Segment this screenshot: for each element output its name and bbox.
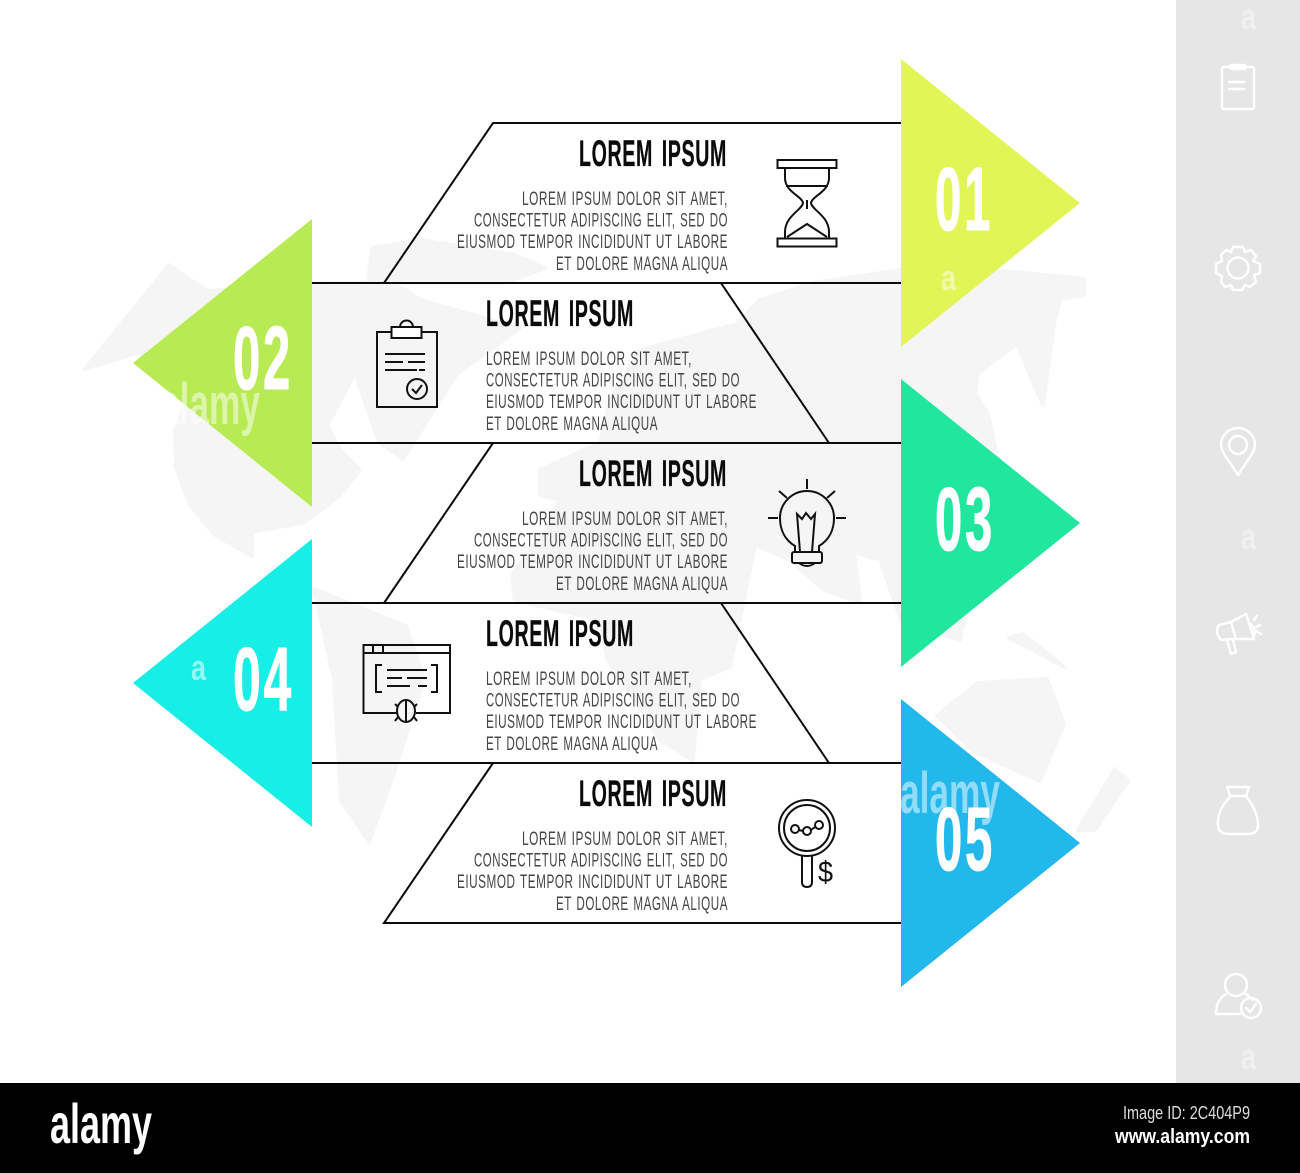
row 4 text: EIUSMOD TEMPOR INCIDIDUNT UT LABORE xyxy=(486,711,757,733)
row 5 text: CONSECTETUR ADIPISCING ELIT, SED DO xyxy=(474,850,728,872)
row 5 text xyxy=(457,773,728,915)
triangle 03 xyxy=(901,379,1080,667)
triangle 05: 05 xyxy=(935,790,995,890)
watermarks: a xyxy=(1241,1036,1257,1077)
watermarks: alamy xyxy=(160,372,260,437)
row 2 text: CONSECTETUR ADIPISCING ELIT, SED DO xyxy=(486,370,740,392)
triangle 04: 04 xyxy=(233,630,294,730)
sidebar icon: gear xyxy=(1216,247,1260,290)
row 5 text: LOREM IPSUM xyxy=(579,773,727,814)
row 5 text: LOREM IPSUM DOLOR SIT AMET, xyxy=(522,828,728,850)
row 3 text xyxy=(457,453,728,595)
footer bar: alamy xyxy=(50,1092,152,1155)
icon: hourglass xyxy=(778,160,836,246)
footer bar: www.alamy.com xyxy=(1114,1126,1250,1148)
watermarks: alamy xyxy=(900,761,1000,826)
icon: magnifier with dollar: $ xyxy=(818,856,833,889)
icon: light bulb xyxy=(768,479,846,566)
row 5 text: ET DOLORE MAGNA ALIQUA xyxy=(556,893,728,915)
triangle 02: 02 xyxy=(233,309,293,409)
row 3 text: ET DOLORE MAGNA ALIQUA xyxy=(556,573,728,595)
row 4 text: LOREM IPSUM xyxy=(486,613,634,654)
row 4 text xyxy=(486,613,757,755)
row 2 text: EIUSMOD TEMPOR INCIDIDUNT UT LABORE xyxy=(486,391,757,413)
footer bar xyxy=(0,1083,1300,1173)
sidebar icon: clipboard xyxy=(1222,65,1254,109)
background world map xyxy=(85,240,1128,842)
row 3 text: CONSECTETUR ADIPISCING ELIT, SED DO xyxy=(474,530,728,552)
triangle 01: 01 xyxy=(935,150,993,250)
triangle 01 xyxy=(901,59,1080,347)
row 2 text: LOREM IPSUM xyxy=(486,293,634,334)
triangle 05 xyxy=(901,699,1080,987)
watermarks: a xyxy=(1241,516,1257,557)
row 1 text: ET DOLORE MAGNA ALIQUA xyxy=(556,253,728,275)
row 3 text: LOREM IPSUM DOLOR SIT AMET, xyxy=(522,508,728,530)
sidebar icon: money bag xyxy=(1218,787,1258,834)
row 1 text: LOREM IPSUM DOLOR SIT AMET, xyxy=(522,188,728,210)
icon: clipboard with check xyxy=(377,320,437,407)
icon: magnifier with dollar xyxy=(779,800,835,889)
sidebar icon: megaphone xyxy=(1217,614,1261,654)
row 1 text: LOREM IPSUM xyxy=(579,133,727,174)
triangle 02 xyxy=(133,219,312,507)
watermarks: a xyxy=(191,647,207,688)
row 4 text: CONSECTETUR ADIPISCING ELIT, SED DO xyxy=(486,690,740,712)
watermarks: a xyxy=(941,257,957,298)
row 1 text: CONSECTETUR ADIPISCING ELIT, SED DO xyxy=(474,210,728,232)
row 1 text: EIUSMOD TEMPOR INCIDIDUNT UT LABORE xyxy=(457,231,728,253)
row 2 text: ET DOLORE MAGNA ALIQUA xyxy=(486,413,658,435)
band outlines xyxy=(312,123,901,923)
row 2 text: LOREM IPSUM DOLOR SIT AMET, xyxy=(486,348,692,370)
row 5 text: EIUSMOD TEMPOR INCIDIDUNT UT LABORE xyxy=(457,871,728,893)
row 1 text xyxy=(457,133,728,275)
row 3 text: LOREM IPSUM xyxy=(579,453,727,494)
row 2 text xyxy=(486,293,757,435)
sidebar panel xyxy=(1176,0,1300,1083)
row 4 text: LOREM IPSUM DOLOR SIT AMET, xyxy=(486,668,692,690)
footer bar: Image ID: 2C404P9 xyxy=(1123,1103,1250,1123)
row 3 text: EIUSMOD TEMPOR INCIDIDUNT UT LABORE xyxy=(457,551,728,573)
sidebar icon: location pin xyxy=(1221,428,1255,475)
row 4 text: ET DOLORE MAGNA ALIQUA xyxy=(486,733,658,755)
triangle 03: 03 xyxy=(935,470,995,570)
triangle 04 xyxy=(133,539,312,827)
watermarks xyxy=(160,0,1257,1077)
sidebar icon: user with check xyxy=(1216,974,1261,1018)
icon: certificate with bug xyxy=(364,645,450,722)
